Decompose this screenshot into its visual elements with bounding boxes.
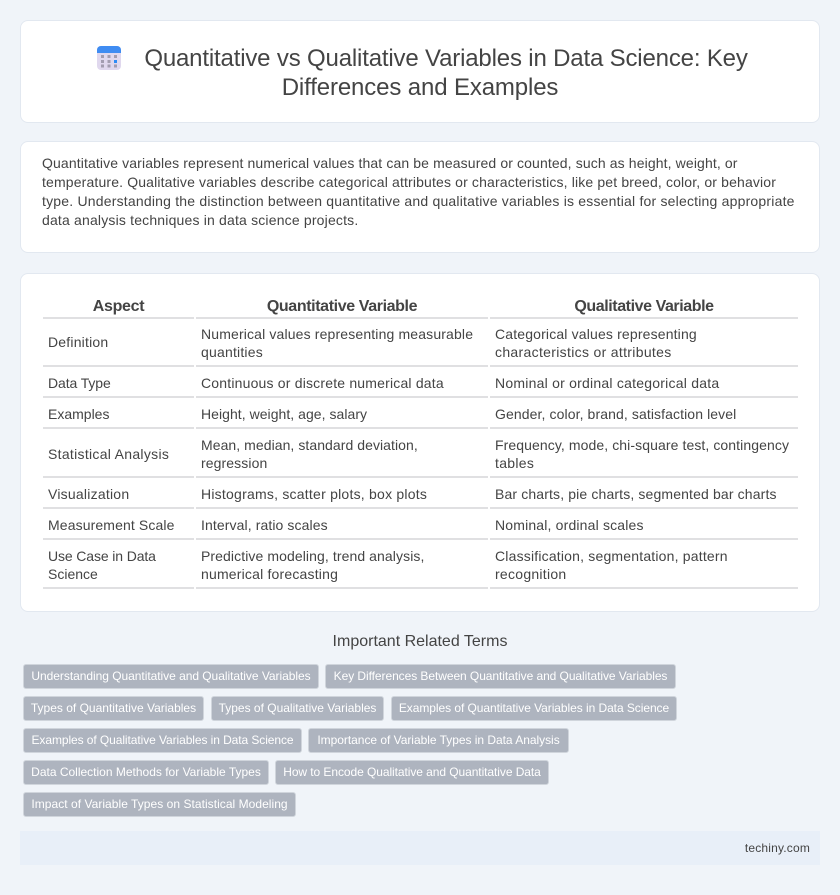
table header: Aspect xyxy=(93,298,144,315)
related term tags: Impact of Variable Types on Statistical Modeling xyxy=(31,797,288,811)
related term tags: Key Differences Between Quantitative and Qualitative Variables xyxy=(334,669,667,683)
row: data type: Continuous or discrete numerical data xyxy=(201,375,444,391)
row: definition: Definition xyxy=(48,334,108,350)
row: definition: characteristics or attributes xyxy=(495,344,672,360)
footer bar xyxy=(20,831,820,865)
intro text: temperature. Qualitative variables describe categorical attributes or characteristics, like pet breed, color, or behavior xyxy=(42,174,776,190)
row: statistical analysis: Frequency, mode, chi-square test, contingency xyxy=(495,437,789,453)
row: definition xyxy=(48,326,697,360)
row: statistical analysis xyxy=(48,437,789,471)
row: visualization: Bar charts, pie charts, segmented bar charts xyxy=(495,486,777,502)
table header: Qualitative Variable xyxy=(574,298,714,315)
row: data type: Data Type xyxy=(48,375,111,391)
related term tags: How to Encode Qualitative and Quantitative Data xyxy=(283,765,541,779)
intro text: data analysis techniques in data science projects. xyxy=(42,212,358,228)
row: statistical analysis: Mean, median, standard deviation, xyxy=(201,437,418,453)
row: measurement scale xyxy=(48,517,644,533)
row: use case: numerical forecasting xyxy=(201,566,338,582)
row: measurement scale: Nominal, ordinal scales xyxy=(495,517,644,533)
row: definition: Categorical values representing xyxy=(495,326,697,342)
row: use case xyxy=(48,548,728,582)
row: statistical analysis: tables xyxy=(495,455,534,471)
row: definition: Numerical values representing measurable xyxy=(201,326,473,342)
row: examples: Height, weight, age, salary xyxy=(201,406,367,422)
related term tags: Understanding Quantitative and Qualitative Variables xyxy=(31,669,311,683)
related terms heading: Important Related Terms xyxy=(333,633,507,650)
row: use case: recognition xyxy=(495,566,566,582)
row: examples: Gender, color, brand, satisfaction level xyxy=(495,406,736,422)
table panel xyxy=(20,273,820,612)
row: visualization xyxy=(48,486,777,502)
row: examples: Examples xyxy=(48,406,109,422)
intro text: type. Understanding the distinction between quantitative and qualitative variables is essential for selecting appropriate xyxy=(42,193,795,209)
row: examples xyxy=(48,406,736,422)
related term tags: Types of Quantitative Variables xyxy=(31,701,196,715)
related term tags: Examples of Qualitative Variables in Data Science xyxy=(32,733,294,747)
title xyxy=(144,45,748,101)
icon: calendar xyxy=(97,46,121,70)
intro text: Quantitative variables represent numerical values that can be measured or counted, such as height, weight, or xyxy=(42,155,738,171)
row: measurement scale: Interval, ratio scales xyxy=(201,517,328,533)
related term tags xyxy=(23,664,677,817)
table header xyxy=(93,298,714,315)
row: use case: Predictive modeling, trend analysis, xyxy=(201,548,424,564)
intro text xyxy=(42,155,795,228)
row: measurement scale: Measurement Scale xyxy=(48,517,175,533)
row: visualization: Histograms, scatter plots, box plots xyxy=(201,486,427,502)
related term tags: Examples of Quantitative Variables in Data Science xyxy=(399,701,669,715)
row: use case: Classification, segmentation, pattern xyxy=(495,548,728,564)
header panel xyxy=(20,20,820,123)
row: statistical analysis: regression xyxy=(201,455,267,471)
table header: Quantitative Variable xyxy=(267,298,417,315)
related term tags: Types of Qualitative Variables xyxy=(219,701,376,715)
row: data type: Nominal or ordinal categorical data xyxy=(495,375,719,391)
row: use case: Use Case in Data xyxy=(48,548,156,564)
row: definition: quantities xyxy=(201,344,263,360)
related term tags: Importance of Variable Types in Data Analysis xyxy=(317,733,560,747)
intro panel xyxy=(20,141,820,253)
title: Quantitative vs Qualitative Variables in Data Science: Key xyxy=(144,45,748,72)
title: Differences and Examples xyxy=(282,74,558,101)
footer site name: techiny.com xyxy=(745,841,810,855)
row: data type xyxy=(48,375,720,391)
row: statistical analysis: Statistical Analysis xyxy=(48,446,169,462)
related term tags: Data Collection Methods for Variable Types xyxy=(31,765,261,779)
comparison table xyxy=(43,298,798,589)
row: visualization: Visualization xyxy=(48,486,129,502)
row: use case: Science xyxy=(48,566,98,582)
